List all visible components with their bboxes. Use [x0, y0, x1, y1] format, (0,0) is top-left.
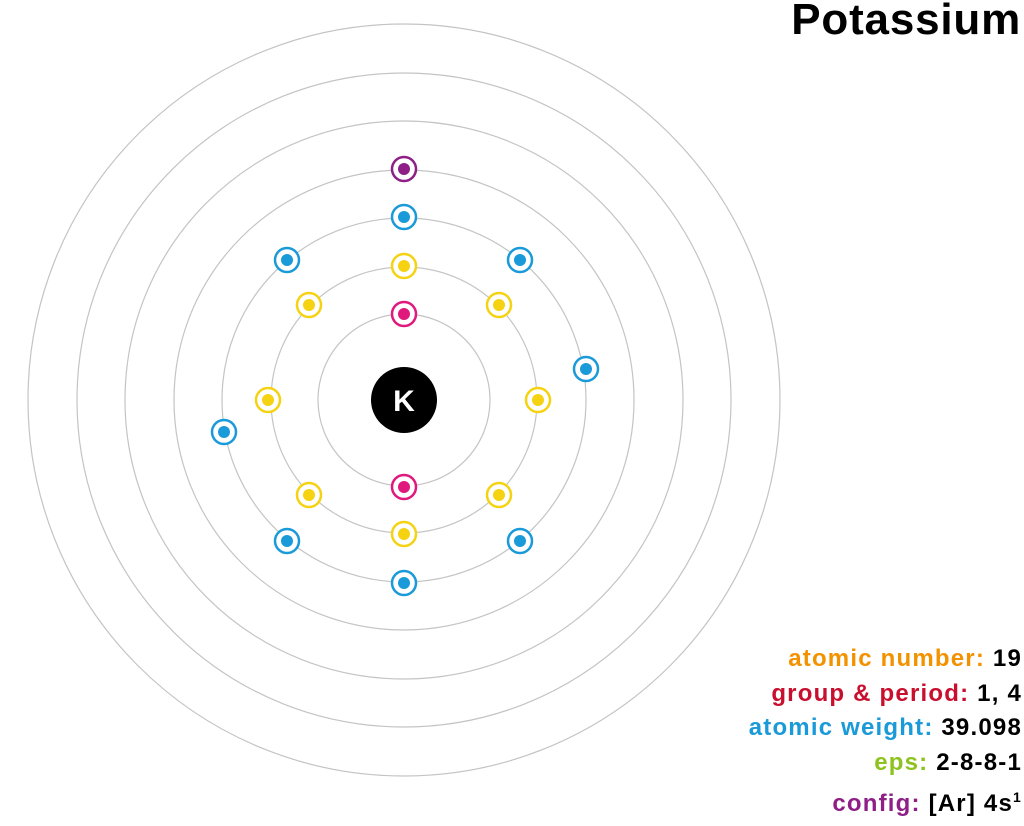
electrons shell 3	[212, 205, 598, 595]
info block: config: [Ar] 4s1	[832, 789, 1022, 817]
electrons shell 1	[392, 302, 416, 499]
nucleus	[371, 367, 437, 433]
electron shell 4	[392, 157, 416, 181]
info block	[749, 645, 1022, 817]
electrons shell 2	[256, 254, 550, 546]
info block: eps: 2-8-8-1	[874, 748, 1022, 776]
info block: group & period: 1, 4	[771, 680, 1022, 706]
info block: atomic weight: 39.098	[749, 714, 1022, 741]
info block: atomic number: 19	[788, 645, 1022, 672]
nucleus: K	[393, 385, 415, 418]
